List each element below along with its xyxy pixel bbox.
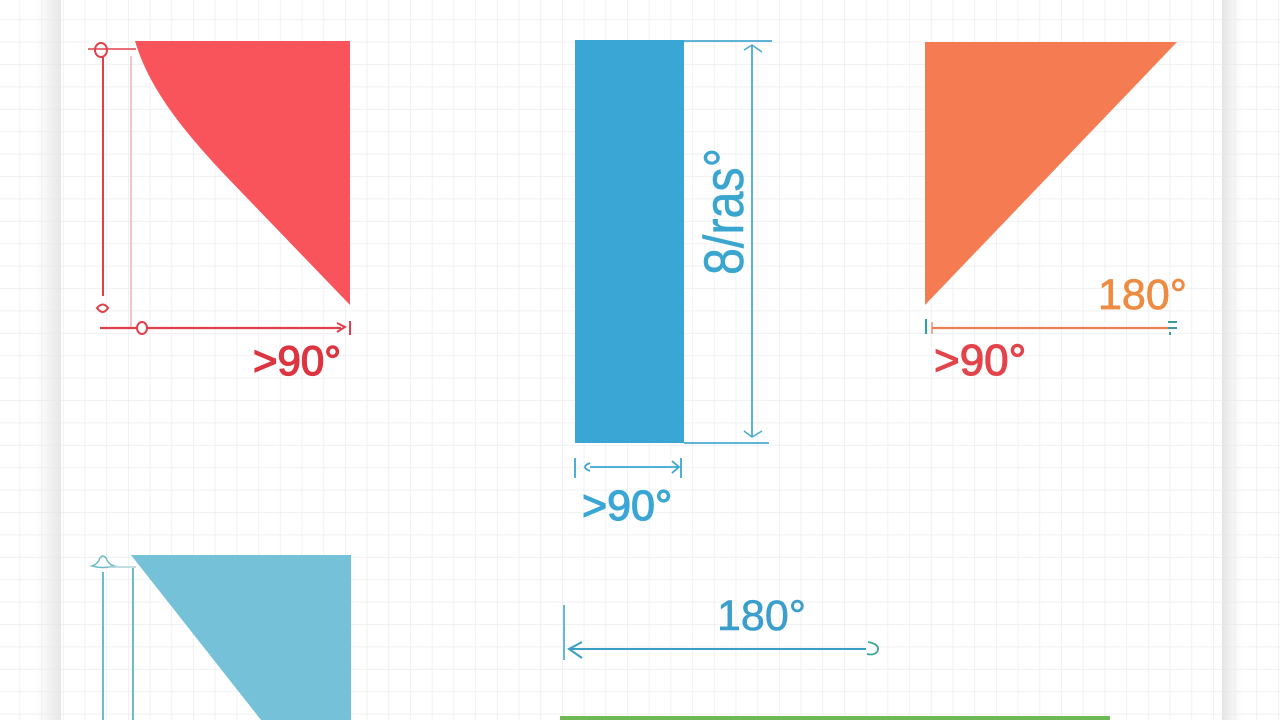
shape: red curved wedge [135, 41, 350, 305]
label: rotated blue text: 8/ras° [692, 148, 755, 275]
label: red greater than 90 degrees: >90° [934, 336, 1026, 385]
dimension: blue width measure [575, 458, 681, 478]
panel: teal triangle with dimensions [92, 555, 351, 720]
panel: red curved shape with dimensions [88, 41, 350, 384]
dimension: red horizontal measure [100, 321, 350, 335]
shape: green bar [560, 716, 1110, 720]
shape: teal wedge [131, 555, 351, 720]
dimension: orange horizontal measure [926, 319, 1177, 335]
dimension: blue horizontal arrow [564, 605, 878, 660]
dimension: blue vertical measure [684, 41, 772, 443]
shape: orange triangle [925, 42, 1177, 305]
panel: blue 180 degree measure [560, 592, 1110, 720]
label: orange 180 degrees: 180° [1098, 271, 1187, 319]
shape: blue rectangle [575, 40, 684, 443]
panel: blue rectangle with dimensions [575, 40, 772, 530]
label: red greater than 90 degrees: >90° [253, 337, 341, 384]
panel: orange triangle with dimensions [925, 42, 1187, 385]
dimension: red vertical measure [88, 43, 136, 328]
label: blue greater than 90 degrees: >90° [582, 482, 672, 530]
label: blue 180 degrees: 180° [717, 592, 806, 640]
dimension: teal vertical measure [92, 556, 136, 720]
